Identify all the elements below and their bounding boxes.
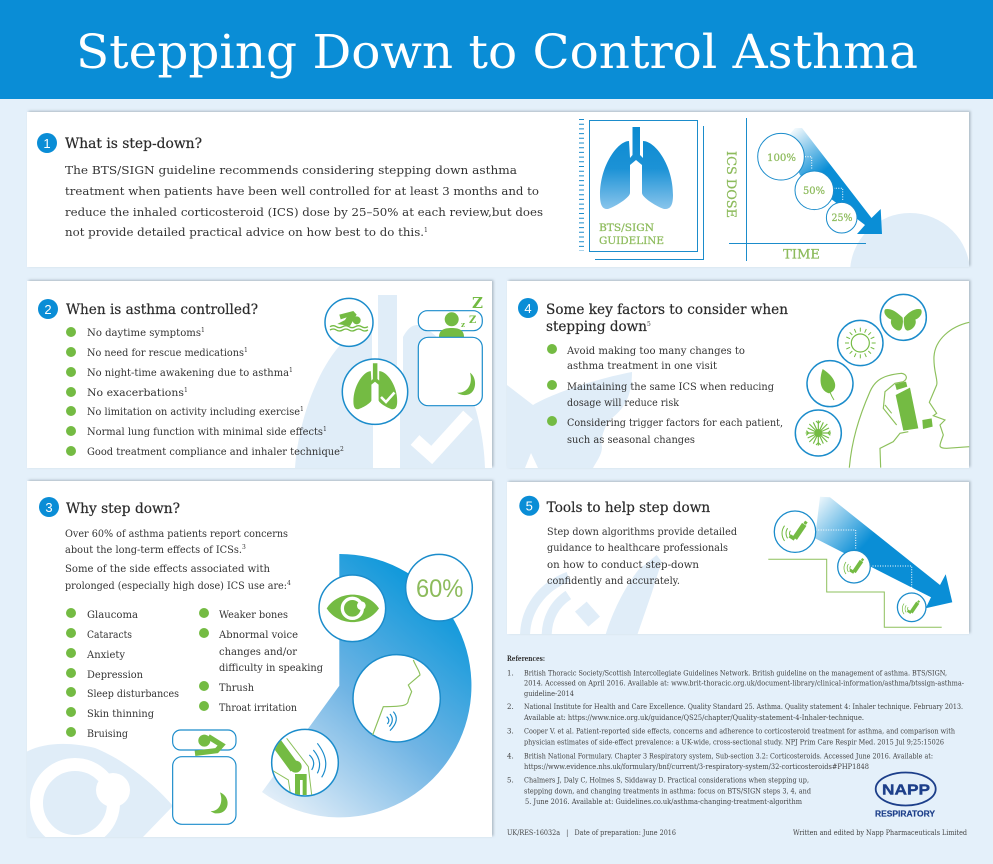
badge 1: 1: [43, 136, 51, 151]
intro text: Some of the side effects associated with: [65, 563, 270, 575]
badge 3: 3: [45, 500, 53, 515]
icon: healthy lungs: [342, 359, 408, 424]
references: stepping down, and changing treatments in asthma: focus on BTS/SIGN steps 3, 4, and: [524, 787, 811, 795]
intro text: Over 60% of asthma patients report concerns: [65, 528, 288, 540]
header band: [0, 0, 993, 99]
references: 2.: [507, 703, 514, 711]
references: 3.: [507, 728, 514, 736]
side effects list left: Anxiety: [86, 649, 125, 661]
badge 5: 5: [526, 498, 533, 514]
references: Cooper V. et al. Patient-reported side effects, concerns and adherence to corticosteroid treatment for asthma, and comparison with: [524, 728, 955, 736]
pale butterfly background: [507, 372, 632, 468]
callout: 60%: 60%: [416, 575, 463, 603]
references: physician estimates of side-effect prevalence: a UK-wide, cross-sectional study. NPJ Prim Care Respir Med. 2015 Jul 9;25:15026: [524, 739, 944, 747]
dose circles: 100%: [767, 152, 796, 164]
side effect icons: [272, 554, 472, 796]
icon: eye: [319, 575, 386, 642]
icon: swimmer: [325, 298, 373, 346]
x axis label: TIME: [783, 248, 820, 262]
badge 2: 2: [44, 302, 52, 317]
icon: knee: [272, 729, 338, 796]
body text 5: confidently and accurately.: [547, 575, 680, 587]
badge 5: [519, 496, 539, 516]
control criteria list: No daytime symptoms: [87, 327, 201, 339]
icon: sleeping person in bed: Z: [469, 315, 476, 326]
step-down arrow: [785, 128, 882, 234]
control criteria list: [66, 327, 344, 458]
logo: Napp Respiratory: RESPIRATORY: [875, 810, 936, 818]
control criteria list: 1: [244, 347, 248, 354]
icon group: triggers and inhaler user: [795, 294, 969, 468]
arrow: [815, 497, 952, 608]
guideline label: [599, 222, 664, 247]
body text 5: Step down algorithms provide detailed: [547, 526, 737, 538]
control criteria list: Normal lung function with minimal side effects: [87, 426, 323, 438]
side effects list right: Weaker bones: [219, 609, 288, 621]
stairs line: [768, 559, 942, 627]
factor list: Maintaining the same ICS when reducing: [567, 381, 774, 393]
body text 5: guidance to healthcare professionals: [547, 542, 728, 554]
footer: [507, 829, 967, 837]
dose circles: 50%: [803, 185, 825, 197]
heading 2: When is asthma controlled?: [66, 302, 258, 318]
logo: Napp Respiratory: [875, 772, 936, 818]
icon: sleeping person in bed: Z: [472, 294, 483, 312]
body text 1: treatment when patients have been well controlled for at least 3 months and to: [65, 184, 539, 198]
pale lungs background: [295, 295, 485, 468]
control criteria list: No exacerbations: [87, 387, 184, 399]
references: https://www.evidence.nhs.uk/formulary/bnf/current/3-respiratory-system/32-corticosteroids#PHP1848: [524, 763, 869, 771]
side effects list right: Thrush: [219, 682, 254, 694]
heading 4: [546, 302, 788, 335]
dose circles: [758, 133, 857, 233]
gradient sector: [262, 554, 471, 817]
intro text: 3: [242, 544, 246, 551]
icon: sun: [838, 320, 883, 366]
references: British National Formulary. Chapter 3 Respiratory system, Sub-section 3.2: Corticosteroids. Accessed June 2016. Available at:: [524, 753, 933, 761]
body text 1: [65, 163, 543, 239]
inhaler icon circles: [774, 511, 926, 622]
panel 5: tools to help step down: [507, 482, 969, 637]
callout: 60%: [406, 554, 472, 621]
control criteria list: No night-time awakening due to asthma: [87, 367, 290, 379]
body text 1: reduce the inhaled corticosteroid (ICS) dose by 25–50% at each review,but does: [65, 205, 543, 219]
ICS dose chart: [723, 118, 882, 262]
badge 1: [37, 133, 57, 153]
guideline label: BTS/SIGN: [599, 222, 654, 234]
side effects list left: Skin thinning: [87, 708, 154, 720]
badge 3: [39, 497, 59, 517]
icon: person with broken sleep: [173, 730, 236, 824]
side effects list left: Cataracts: [87, 629, 132, 641]
guideline label: GUIDELINE: [599, 235, 664, 247]
references: British Thoracic Society/Scottish Intercollegiate Guidelines Network. British guideline on the management of asthma. BTS/SIGN,: [524, 670, 947, 678]
control criteria list: 1: [184, 387, 188, 394]
control criteria list: Good treatment compliance and inhaler technique: [87, 446, 340, 458]
factor list: such as seasonal changes: [567, 434, 695, 446]
heading 3: Why step down?: [66, 501, 180, 517]
references: Available at: https://www.nice.org.uk/guidance/QS25/chapter/Quality-statement-4-Inhaler-technique.: [523, 714, 864, 722]
side effects list right: Throat irritation: [219, 702, 297, 714]
y axis label: ICS DOSE: [723, 151, 738, 218]
body text 1: not provide detailed practical advice on how best to do this.: [65, 225, 424, 239]
pale inhaler background: [525, 555, 662, 637]
step-down arrow with stairs: [768, 497, 952, 627]
icon: sleeping person in bed: z: [461, 320, 465, 329]
inhaler: [895, 382, 933, 431]
body text 1: 1: [424, 227, 428, 234]
references: 5.: [507, 776, 514, 784]
factor list: asthma treatment in one visit: [567, 360, 718, 372]
icon: butterfly: [880, 294, 926, 340]
control criteria list: 1: [289, 367, 293, 374]
dose circles: 25%: [832, 213, 852, 224]
side effects list left: Depression: [87, 669, 143, 681]
footer: UK/RES-16032a | Date of preparation: June 2016: [507, 829, 676, 837]
side effects list right: difficulty in speaking: [219, 662, 323, 674]
face and hand outline: [929, 322, 969, 448]
pale eye background: [26, 744, 173, 842]
panel 3: why step down: [26, 481, 492, 842]
heading 1: What is step-down?: [65, 136, 202, 152]
logo: Napp Respiratory: NAPP: [882, 782, 930, 798]
pale background circle: [850, 213, 969, 267]
heading 4: 5: [647, 321, 651, 328]
factor list: Considering trigger factors for each patient,: [567, 417, 783, 429]
icon: leaf: [807, 361, 853, 407]
side effects list left: Bruising: [87, 728, 128, 740]
lungs icon: [600, 127, 673, 209]
panel 2: when is asthma controlled: [27, 281, 492, 468]
references: guideline-2014: [524, 690, 575, 698]
panel 1: what is step-down: [27, 110, 972, 268]
factor list: [547, 344, 783, 446]
side effects list right: changes and/or: [219, 646, 298, 658]
footer: Written and edited by Napp Pharmaceuticals Limited: [793, 829, 967, 837]
factor list: Avoid making too many changes to: [566, 345, 745, 357]
intro text: prolonged (especially high dose) ICS use are:: [65, 580, 287, 592]
side effects list left: [66, 608, 179, 740]
control criteria list: No need for rescue medications: [87, 347, 244, 359]
icon: snowflake: [795, 410, 841, 456]
side effects list right: [199, 608, 323, 714]
references: References:: [507, 654, 545, 663]
control criteria list: 1: [300, 406, 304, 413]
guideline book icon: [582, 119, 704, 260]
badge 4: 4: [524, 301, 532, 316]
intro text: about the long-term effects of ICSs.: [65, 544, 242, 556]
badge 4: [518, 298, 538, 318]
control criteria list: 2: [340, 446, 344, 453]
references: Chalmers J, Daly C, Holmes S, Siddaway D. Practical considerations when stepping up,: [524, 776, 809, 784]
heading 4: stepping down: [546, 319, 647, 335]
body text 5: [547, 526, 737, 587]
references: [507, 654, 965, 806]
intro text: [65, 528, 291, 592]
control criteria list: No limitation on activity including exercise: [87, 406, 300, 418]
side effects list right: Abnormal voice: [218, 629, 298, 641]
control criteria list: 1: [201, 327, 205, 334]
body text 1: The BTS/SIGN guideline recommends considering stepping down asthma: [65, 163, 517, 177]
title: Stepping Down to Control Asthma: [76, 25, 918, 80]
control criteria list: 1: [323, 426, 327, 433]
references: 2014. Accessed on April 2016. Available at: www.brit-thoracic.org.uk/document-library/clinical-information/asthma/btssign-asthma-: [524, 680, 965, 688]
heading 5: Tools to help step down: [547, 500, 711, 516]
side effects list left: Sleep disturbances: [87, 688, 179, 700]
icon: throat: [353, 655, 440, 742]
panel 4: key factors: [507, 281, 969, 468]
badge 2: [38, 299, 58, 319]
references: 1.: [507, 670, 514, 678]
heading 4: Some key factors to consider when: [546, 302, 788, 318]
icon: sleeping person in bed: [418, 294, 483, 406]
side effects list left: Glaucoma: [87, 609, 139, 621]
body text 5: on how to conduct step-down: [547, 559, 699, 571]
references: 4.: [507, 753, 514, 761]
references: 5. June 2016. Available at: Guidelines.co.uk/asthma-changing-treatment-algorithm: [525, 798, 802, 806]
intro text: 4: [287, 580, 291, 587]
factor list: dosage will reduce risk: [567, 397, 680, 409]
